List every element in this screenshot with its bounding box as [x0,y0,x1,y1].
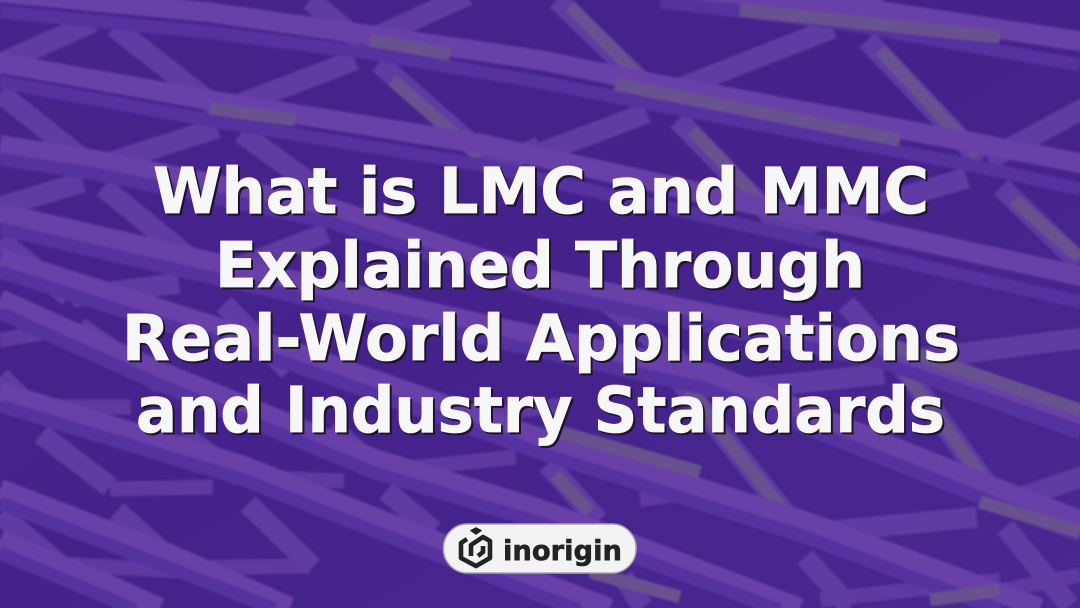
title: Explained Through [215,229,865,302]
icon: inorigin hexagon cube [461,528,490,566]
title: What is LMC and MMC [153,155,929,228]
title: and Industry Standards [136,374,945,447]
title: Real-World Applications [122,302,960,375]
logo pill: inorigin [444,524,636,573]
title [122,155,960,447]
wordmark: inorigin [503,534,622,567]
